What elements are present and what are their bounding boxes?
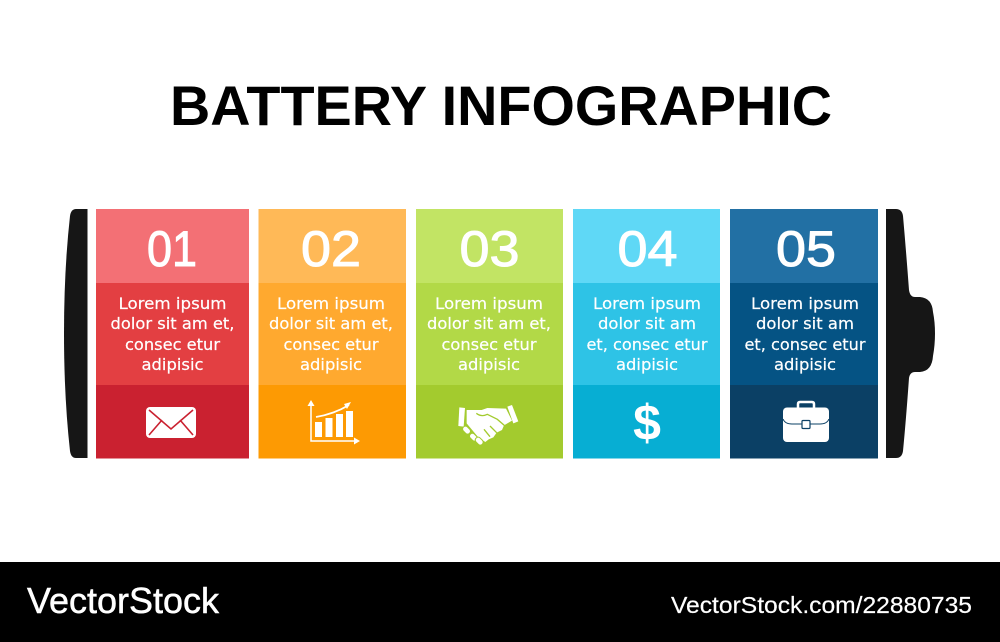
number 03: 03 [460,221,520,277]
text 05: Lorem ipsum [751,294,859,313]
text 02 [269,294,393,374]
footer logo: VectorStock [27,580,220,621]
number 04: 04 [618,221,678,277]
text 05 [744,294,866,374]
icon: growth chart [308,400,360,444]
text 03: consec etur [442,335,537,354]
number 02: 02 [301,221,361,277]
number 01: 01 [147,221,197,277]
text 02: consec etur [284,335,379,354]
panel 04 [573,209,720,458]
icon: envelope [146,407,196,438]
text 01: consec etur [125,335,220,354]
text 05: et, consec etur [744,335,866,354]
battery right cap with terminal [886,209,935,458]
text 01: adipisic [142,355,204,374]
text 04: Lorem ipsum [593,294,701,313]
text 05: adipisic [774,355,836,374]
panel 05 [730,209,878,458]
icon: briefcase [783,402,829,442]
title: BATTERY INFOGRAPHIC [170,74,832,137]
panel 01 [96,209,249,458]
text 01: dolor sit am et, [110,314,234,333]
battery left cap [64,209,88,458]
text 02: Lorem ipsum [277,294,385,313]
text 04 [586,294,708,374]
footer bar [0,562,1000,642]
text 04: adipisic [616,355,678,374]
text 03: dolor sit am et, [427,314,551,333]
text 04: et, consec etur [586,335,708,354]
text 05: dolor sit am [756,314,854,333]
text 02: adipisic [300,355,362,374]
text 03: adipisic [458,355,520,374]
text 04: dolor sit am [598,314,696,333]
panel 02 [258,209,406,458]
icon: dollar: $ [633,395,661,451]
text 02: dolor sit am et, [269,314,393,333]
text 03: Lorem ipsum [435,294,543,313]
text 01: Lorem ipsum [118,294,226,313]
text 03 [427,294,551,374]
footer image id: VectorStock.com/22880735 [671,592,972,618]
icon: handshake [458,405,518,446]
number 05: 05 [776,221,836,277]
text 01 [110,294,234,374]
panel 03 [416,209,563,458]
